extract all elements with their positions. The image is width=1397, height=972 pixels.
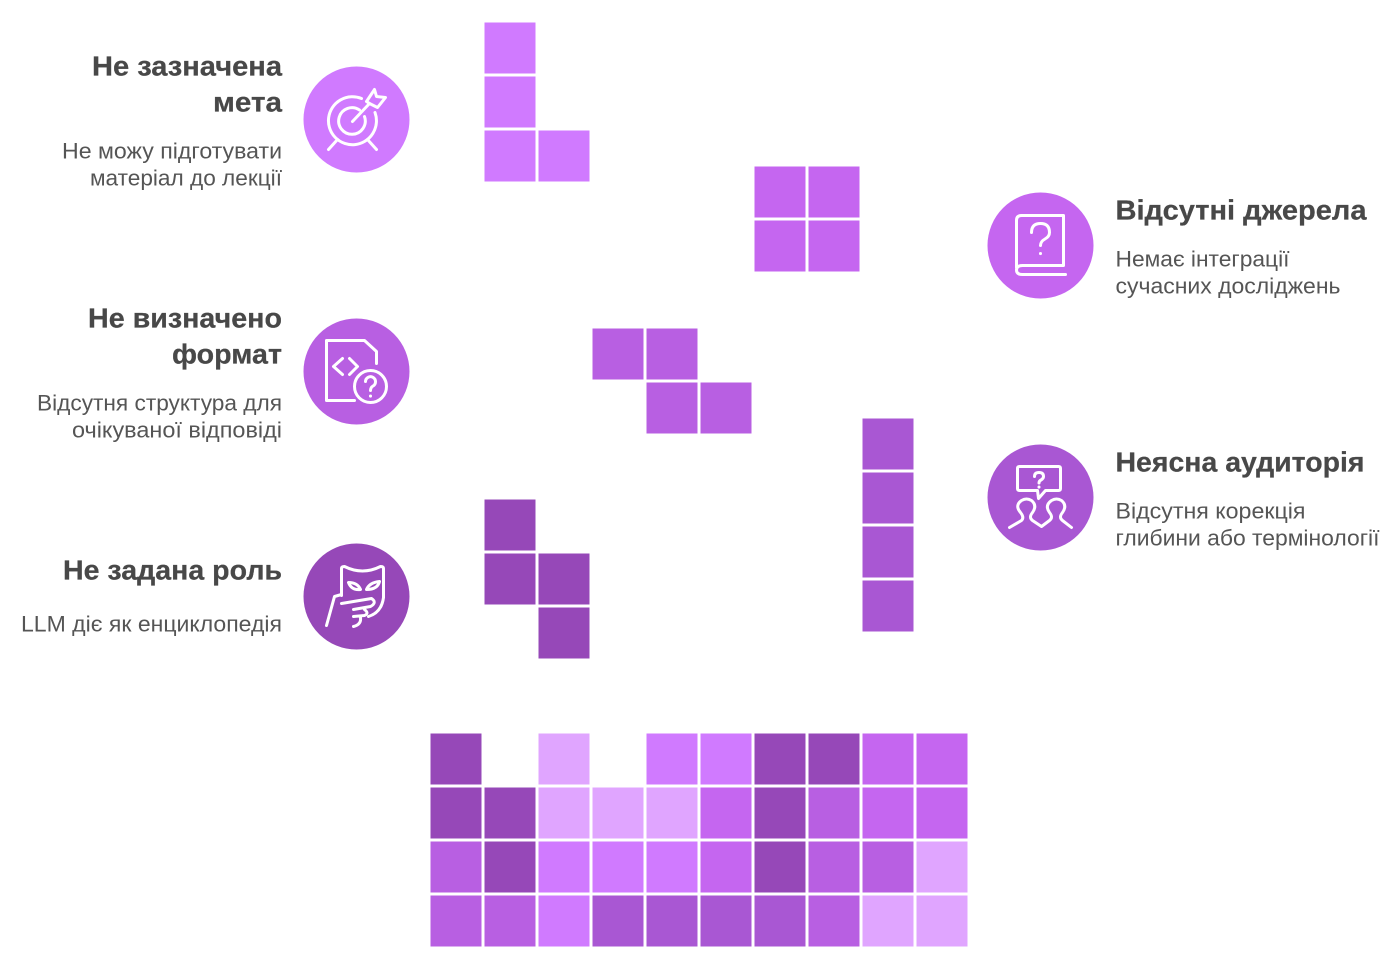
description: missing goal: Не можу підготувати <box>62 138 282 164</box>
block: missing sources <box>988 192 1367 298</box>
description: missing goal: матеріал до лекції <box>90 166 282 190</box>
block: missing goal <box>62 50 410 190</box>
tetromino: S piece <box>484 500 590 658</box>
stacked block grid <box>430 734 968 946</box>
heading: missing sources: Відсутні джерела <box>1116 194 1367 226</box>
heading: missing goal: Не зазначена <box>92 50 282 82</box>
description: missing sources: Немає інтеграції <box>1116 246 1290 272</box>
heading: missing goal: мета <box>213 86 282 118</box>
description: unclear audience <box>1116 498 1380 550</box>
description: undefined format: очікуваної відповіді <box>72 418 282 442</box>
heading: unclear audience: Неясна аудиторія <box>1116 446 1364 478</box>
block: undefined format <box>37 302 410 442</box>
description: unclear audience: Відсутня корекція <box>1116 498 1306 524</box>
description: unclear audience: глибини або термінології <box>1116 526 1380 550</box>
icon: book with question mark <box>988 192 1094 298</box>
icon: two people with question bubble <box>988 444 1094 550</box>
icon: code file with question mark <box>304 318 410 424</box>
icon: target with arrow <box>304 66 410 172</box>
icon: hand holding mask <box>304 544 410 650</box>
description: missing sources: сучасних досліджень <box>1116 274 1340 298</box>
heading: undefined format: формат <box>172 338 282 370</box>
heading: missing goal <box>92 50 282 118</box>
tetromino: L piece <box>484 22 590 182</box>
block: unclear audience <box>988 444 1380 550</box>
tetromino: Z piece <box>592 328 752 434</box>
description: missing role: LLM діє як енциклопедія <box>21 612 282 636</box>
description: undefined format <box>37 390 282 442</box>
description: missing sources <box>1116 246 1340 298</box>
tetromino: square piece <box>754 166 860 272</box>
heading: missing role: Не задана роль <box>63 554 282 586</box>
description: missing goal <box>62 138 282 190</box>
tetromino: I piece <box>862 418 914 632</box>
block: missing role <box>21 544 410 650</box>
description: undefined format: Відсутня структура для <box>37 390 282 416</box>
heading: undefined format: Не визначено <box>88 302 282 334</box>
heading: undefined format <box>88 302 282 370</box>
